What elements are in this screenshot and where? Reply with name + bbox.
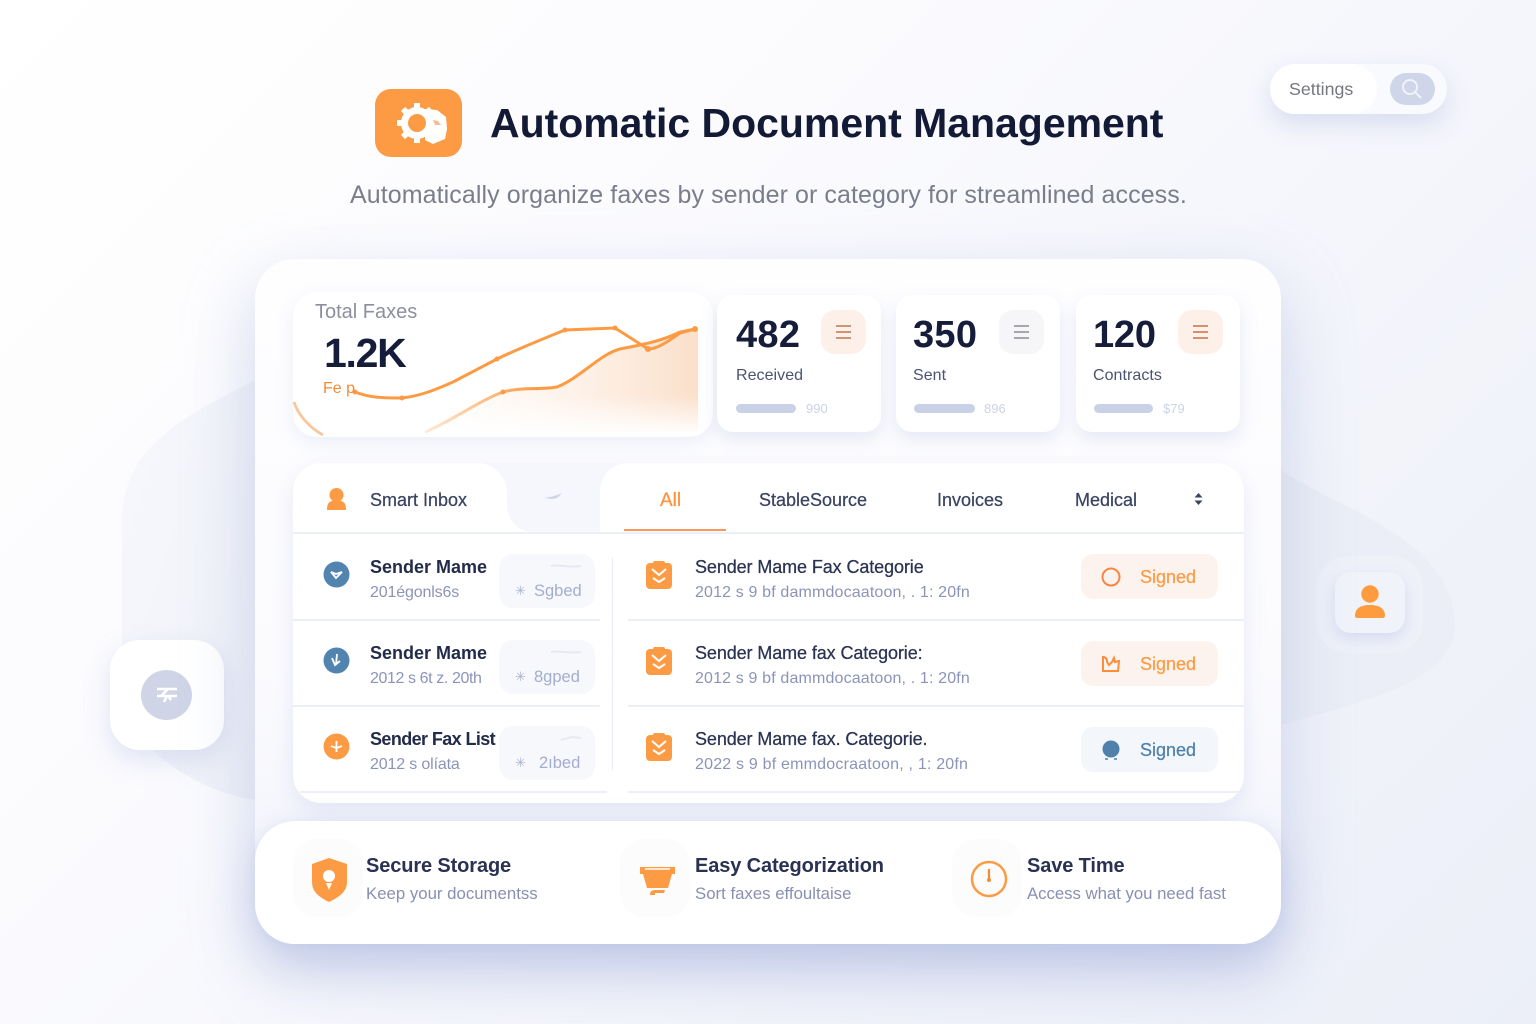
status: [499, 640, 595, 694]
feature: secure storage: [312, 855, 538, 903]
value: 482: [736, 314, 800, 356]
icon: inbox user: [327, 488, 346, 510]
status pill: signed 1: [1081, 554, 1218, 599]
active tab underline: [624, 529, 726, 531]
status: 8gped: [534, 668, 580, 686]
stat card: sent: [896, 295, 1060, 432]
feature: easy categorization: [640, 855, 884, 903]
text: Access what you need fast: [1027, 884, 1226, 903]
small value: 990: [806, 401, 828, 416]
floating tile: filter: [110, 640, 224, 750]
feature: save time: [970, 855, 1226, 903]
icon: blue check: [324, 562, 350, 588]
heading: Secure Storage: [366, 855, 511, 877]
tab: smart inbox: Smart Inbox: [370, 490, 467, 510]
title: Sender Mame Fax Categorie: [695, 557, 924, 577]
title: Sender Mame fax. Categorie.: [695, 729, 927, 749]
icon: shield: [293, 839, 363, 917]
status pill: signed 2: [1081, 641, 1218, 686]
header icon: gear: [375, 89, 462, 157]
icon: clock: [952, 839, 1022, 917]
icon: globe: [1102, 740, 1120, 760]
heading: Save Time: [1027, 855, 1125, 877]
tab: medical: Medical: [1075, 490, 1137, 510]
row 1 left: [324, 557, 582, 601]
label: Signed: [1140, 654, 1196, 674]
title: Sender Mame fax Categorie:: [695, 643, 923, 663]
icon: clipboard: [646, 561, 672, 589]
status: ✳: [515, 583, 526, 598]
icon: clipboard: [646, 647, 672, 675]
icon: book: [1102, 655, 1120, 672]
detail: 2012 s 9 bf dammdocaatoon, . 1: 20fn: [695, 670, 970, 687]
tab: smart inbox background: [293, 463, 507, 507]
progress bar: [914, 404, 975, 413]
status: [499, 554, 595, 608]
value: 350: [913, 314, 977, 356]
title: Automatic Document Management: [490, 100, 1163, 146]
row 2 right: [646, 643, 970, 687]
row 2 left: [324, 643, 582, 687]
detail: 2012 s 9 bf dammdocaatoon, . 1: 20fn: [695, 584, 970, 601]
row 1 right: [646, 557, 970, 601]
tab: all: All: [660, 490, 681, 511]
icon: menu: [821, 310, 866, 354]
settings label: [1270, 64, 1377, 114]
label: Contracts: [1093, 367, 1162, 384]
icon: search: [1390, 73, 1435, 105]
heading: Easy Categorization: [695, 855, 884, 877]
icon: filter: [141, 670, 192, 720]
icon: menu: [999, 310, 1044, 354]
tab: invoices: Invoices: [937, 490, 1003, 510]
status pill: signed 3: [1081, 727, 1218, 772]
icon: sort: [1194, 493, 1202, 505]
tab gap: [507, 463, 630, 532]
label: Total Faxes: [315, 301, 417, 323]
settings label: Settings: [1289, 79, 1353, 99]
main card: [255, 259, 1281, 944]
value: 1.2K: [324, 330, 405, 376]
progress bar: [1094, 404, 1153, 413]
stat card: received: [717, 295, 881, 432]
row 3 left: [324, 729, 582, 773]
tab: all categories background: [600, 463, 700, 532]
icon: blue arrow: [324, 648, 350, 674]
status: ✳: [515, 755, 526, 770]
sender: Sender Mame: [370, 557, 487, 577]
row 3 right: [646, 729, 968, 773]
detail: 2022 s 9 bf emmdocraatoon, , 1: 20fn: [695, 756, 968, 773]
status: ✳: [515, 669, 526, 684]
panel: total faxes chart: [293, 292, 713, 437]
text: Sort faxes effoultaise: [695, 884, 851, 903]
icon: circle: [1102, 568, 1120, 586]
chart: [293, 326, 698, 436]
detail: 2012 s 6t z. 20th: [370, 670, 482, 687]
icon: clipboard: [646, 733, 672, 761]
icon: menu: [1178, 310, 1223, 354]
status: Sgbed: [534, 582, 582, 600]
label: Received: [736, 367, 803, 384]
sender: Sender Mame: [370, 643, 487, 663]
tab: stablesource: StableSource: [759, 490, 867, 510]
small value: 896: [984, 401, 1006, 416]
panel: features: [255, 821, 1281, 944]
detail: 2012 s olíata: [370, 756, 460, 773]
text: Keep your documentss: [366, 884, 538, 903]
icon: tray: [620, 839, 690, 917]
floating tile: user: [1316, 556, 1423, 653]
settings control: [1270, 64, 1447, 114]
sender: Sender Fax List: [370, 729, 495, 749]
icon: orange arrow: [324, 734, 350, 760]
chart tag: Fe p: [323, 380, 355, 397]
detail: 201égonls6s: [370, 584, 459, 601]
icon: user: [1335, 572, 1405, 633]
small value: $79: [1163, 401, 1185, 416]
subtitle: Automatically organize faxes by sender or category for streamlined access.: [350, 181, 1187, 209]
value: 120: [1093, 314, 1156, 356]
tab corner fill: [479, 463, 509, 493]
stat card: contracts: [1076, 295, 1240, 432]
label: Sent: [913, 367, 946, 384]
panel: inbox list: [293, 463, 1244, 803]
status: 2ıbed: [539, 754, 580, 772]
label: Signed: [1140, 740, 1196, 760]
label: Signed: [1140, 567, 1196, 587]
progress bar: [736, 404, 796, 413]
status: [499, 726, 595, 780]
